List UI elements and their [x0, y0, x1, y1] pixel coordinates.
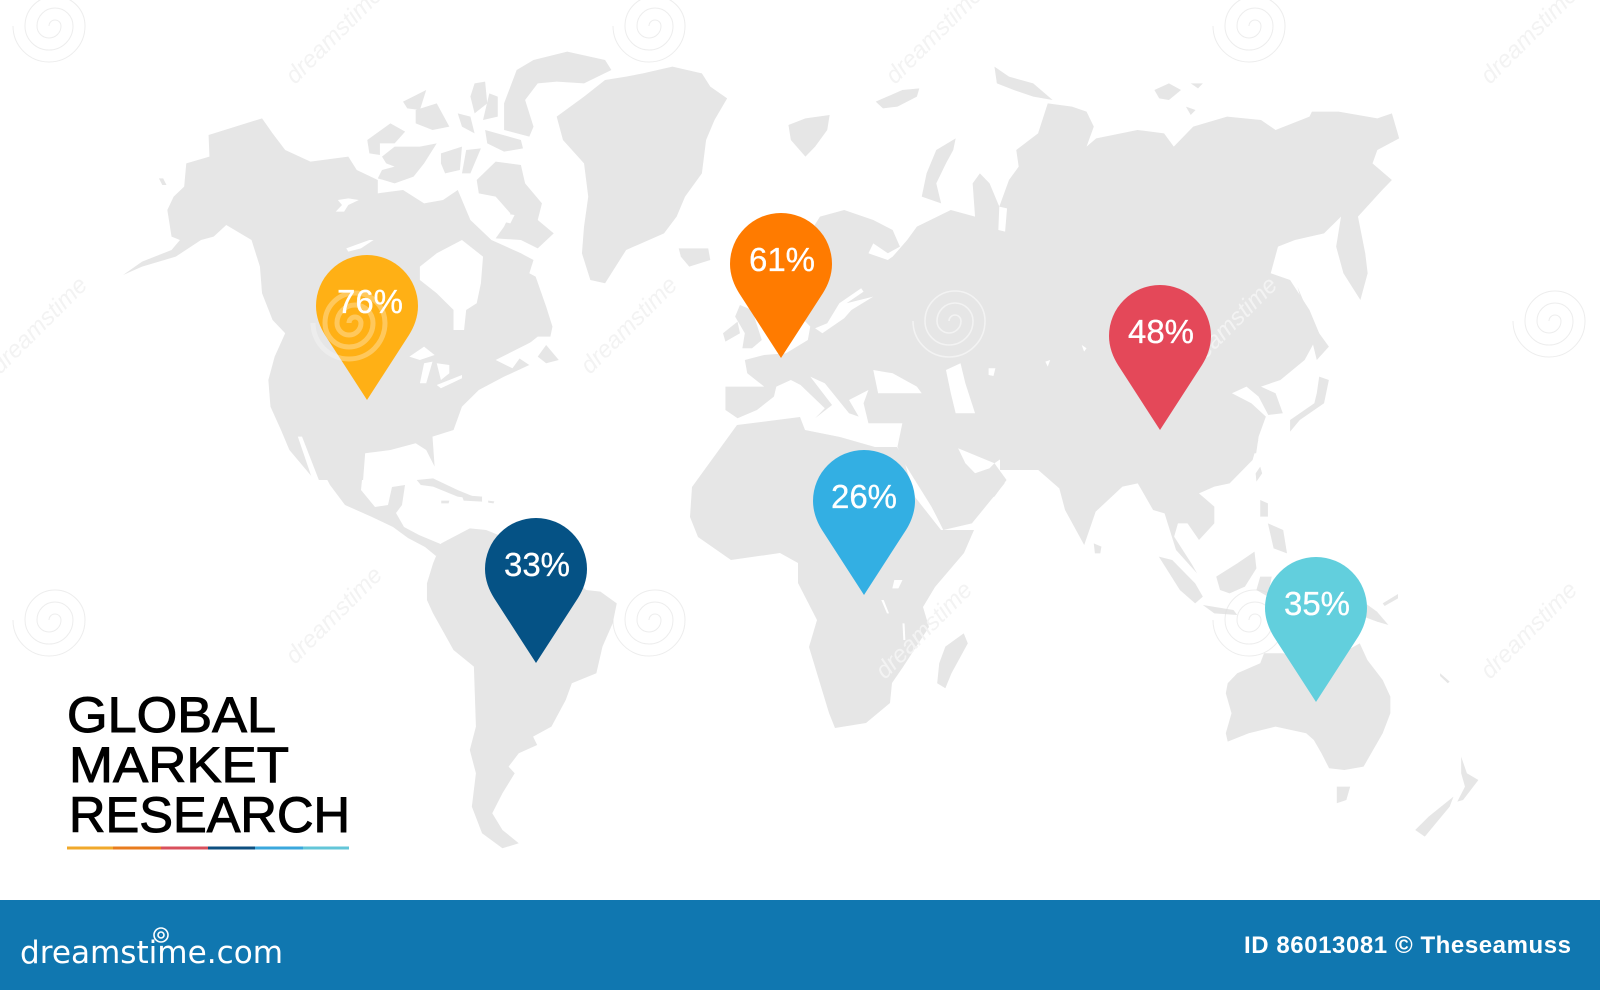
pin: 35% — [1265, 557, 1367, 702]
title: GLOBAL — [67, 687, 276, 743]
pin: 35%: 35% — [1284, 585, 1350, 622]
watermark text: dreamstime — [1175, 271, 1283, 379]
pin: 76% — [313, 255, 418, 400]
pin: 26% — [813, 450, 915, 595]
mexico and central america — [314, 455, 443, 556]
eurasia and arctic islands — [723, 67, 1399, 520]
title underline colour strip — [67, 846, 349, 850]
africa — [690, 417, 974, 728]
pin: 26%: 26% — [831, 478, 897, 515]
pin: 76%: 76% — [337, 283, 403, 320]
south america and caribbean — [417, 440, 1005, 848]
pin: 61% — [730, 213, 832, 358]
title — [67, 687, 350, 843]
watermark text: dreamstime — [280, 561, 388, 669]
footer band — [0, 900, 1600, 990]
title: MARKET — [69, 737, 289, 793]
watermark spirals — [13, 0, 1585, 656]
inland seas and lakes — [298, 198, 1087, 640]
watermark text: dreamstime — [1475, 576, 1583, 684]
watermark text: dreamstime — [870, 576, 978, 684]
title: RESEARCH — [69, 787, 350, 843]
footer image id: ID 86013081 © Theseamuss — [1244, 932, 1571, 959]
pin: 33%: 33% — [504, 546, 570, 583]
pin: 33% — [485, 518, 587, 663]
pin: 48% — [1109, 285, 1211, 430]
world map — [123, 52, 1478, 848]
pin: 48%: 48% — [1128, 313, 1194, 350]
north america, greenland and arctic islands — [123, 52, 727, 480]
footer logo: dreamstime.com — [20, 935, 283, 971]
pin: 61%: 61% — [749, 241, 815, 278]
watermark text: dreamstime — [575, 271, 683, 379]
south and southeast asia, australia and oceania — [1000, 440, 1478, 837]
watermark text — [0, 0, 1583, 684]
